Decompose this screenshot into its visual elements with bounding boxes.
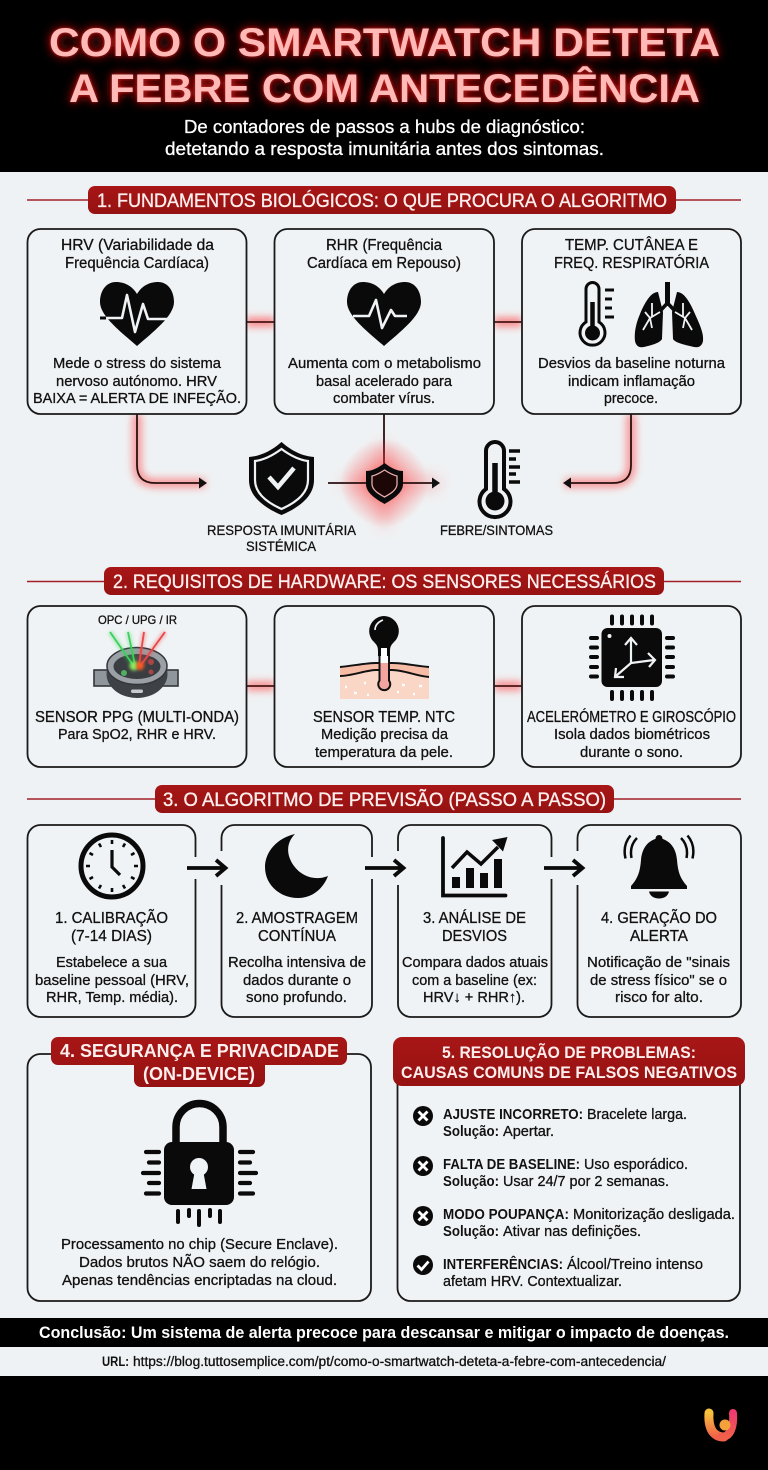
step 3 heading	[423, 910, 526, 945]
panel: step 2 continuous sampling	[222, 825, 372, 1017]
privacy text: Apenas tendências encriptadas na cloud.	[62, 1272, 337, 1289]
wavelength label: OPC / UPG / IR	[98, 613, 177, 627]
section heading 3	[27, 785, 741, 813]
section heading 2	[27, 567, 741, 595]
step 1 heading: (7-14 DIAS)	[71, 928, 152, 945]
temperature heading	[554, 237, 710, 272]
step 4 heading: 4. GERAÇÃO DO	[601, 910, 717, 927]
item: incorrect fit: AJUSTE INCORRETO:	[443, 1106, 583, 1123]
HRV heading	[61, 237, 214, 272]
privacy text	[61, 1236, 338, 1289]
item: power saving mode: MODO POUPANÇA:	[443, 1206, 569, 1223]
section 5 banner: CAUSAS COMUNS DE FALSOS NEGATIVOS	[401, 1063, 737, 1082]
icon: glowing small shield	[328, 439, 440, 527]
section 4 banner: (ON-DEVICE)	[143, 1064, 255, 1084]
step 1 text: RHR, Temp. média).	[46, 989, 178, 1006]
icon: rising chart	[443, 837, 508, 896]
panel: step 3 deviation analysis	[398, 825, 552, 1017]
label: systemic immune response	[207, 522, 357, 554]
icon: ringing bell	[625, 835, 693, 898]
item: missing baseline: Usar 24/7 por 2 semanas.	[503, 1173, 669, 1190]
RHR heading	[307, 237, 461, 272]
URL bar	[0, 1347, 768, 1376]
item: incorrect fit	[413, 1106, 687, 1140]
arrows between steps	[187, 851, 582, 885]
icon: moon	[265, 834, 328, 898]
item: interferences: Álcool/Treino intenso	[567, 1256, 703, 1273]
motion sensor description: Isola dados biométricos	[554, 726, 710, 743]
step 4 text: de stress físico" se o	[590, 972, 727, 989]
step 3 text: HRV↓ + RHR↑).	[423, 989, 525, 1006]
step 3 text	[402, 954, 548, 1006]
PPG description: SENSOR PPG (MULTI-ONDA)	[35, 709, 239, 726]
item: interferences: INTERFERÊNCIAS:	[443, 1255, 563, 1273]
item: incorrect fit: Solução:	[443, 1123, 499, 1140]
temperature description	[538, 355, 726, 407]
temperature description: Desvios da baseline noturna	[538, 355, 726, 372]
HRV description: BAIXA = ALERTA DE INFEÇÃO.	[33, 390, 241, 407]
icon: chip padlock	[143, 1104, 256, 1225]
URL bar: https://blog.tuttosemplice.com/pt/como-o-smartwatch-deteta-a-febre-com-antecedencia/	[133, 1354, 666, 1369]
section heading 2: 2. REQUISITOS DE HARDWARE: OS SENSORES NECESSÁRIOS	[113, 572, 656, 593]
section heading 3: 3. O ALGORITMO DE PREVISÃO (PASSO A PASSO)	[163, 789, 606, 811]
temperature heading: FREQ. RESPIRATÓRIA	[554, 255, 710, 272]
step 2 text: dados durante o	[243, 972, 351, 989]
step 4 heading: ALERTA	[630, 928, 689, 945]
temperature description: indicam inflamação	[568, 373, 695, 390]
panel: step 4 alert generation	[578, 825, 741, 1017]
step 2 heading	[236, 910, 358, 945]
RHR description: combater vírus.	[333, 390, 435, 407]
icon: logo	[709, 1413, 733, 1437]
title: A FEBRE COM ANTECEDÊNCIA	[69, 65, 700, 111]
item: missing baseline: Solução:	[443, 1173, 499, 1190]
step 4 text: Notificação de "sinais	[587, 954, 730, 971]
HRV description: Mede o stress do sistema	[53, 355, 222, 372]
step 3 heading: DESVIOS	[442, 928, 507, 945]
NTC description: Medição precisa da	[321, 726, 449, 743]
step 2 heading: CONTÍNUA	[258, 928, 337, 945]
section heading 1: 1. FUNDAMENTOS BIOLÓGICOS: O QUE PROCURA O ALGORITMO	[97, 190, 667, 212]
panel: RHR	[274, 229, 494, 414]
section 5 banner	[393, 1037, 745, 1086]
subtitle: De contadores de passos a hubs de diagnóstico:	[184, 117, 585, 137]
HRV description	[33, 355, 241, 407]
label: systemic immune response: RESPOSTA IMUNITÁRIA	[207, 522, 357, 538]
privacy text: Processamento no chip (Secure Enclave).	[61, 1236, 338, 1253]
conclusion bar: Conclusão: Um sistema de alerta precoce para descansar e mitigar o impacto de doenças.	[39, 1324, 729, 1342]
step 1 heading	[55, 910, 168, 945]
item: power saving mode: Ativar nas definições.	[503, 1223, 641, 1240]
title: COMO O SMARTWATCH DETETA	[49, 21, 720, 65]
NTC description: SENSOR TEMP. NTC	[313, 709, 455, 726]
header band	[0, 0, 768, 172]
RHR heading: Cardíaca em Repouso)	[307, 255, 461, 272]
item: incorrect fit: Apertar.	[503, 1123, 554, 1140]
PPG description: Para SpO2, RHR e HRV.	[58, 726, 216, 743]
step 4 text	[587, 954, 730, 1006]
icon: thermometer	[580, 282, 614, 345]
icon: PPG sensor with light beams	[94, 613, 178, 698]
item: interferences: afetam HRV. Contextualizar.	[443, 1273, 622, 1290]
motion sensor description	[527, 709, 736, 761]
step 1 text	[35, 954, 189, 1006]
section 5 banner: 5. RESOLUÇÃO DE PROBLEMAS:	[442, 1042, 696, 1062]
item: interferences	[413, 1255, 703, 1290]
PPG description	[35, 709, 239, 743]
step 4 text: risco for alto.	[615, 989, 703, 1006]
privacy text: Dados brutos NÃO saem do relógio.	[79, 1254, 320, 1271]
step 2 text	[228, 954, 366, 1006]
motion sensor description: durante o sono.	[580, 744, 683, 761]
item: incorrect fit: Bracelete larga.	[587, 1106, 687, 1123]
bottom black band	[0, 1376, 768, 1470]
temperature heading: TEMP. CUTÂNEA E	[565, 237, 698, 254]
step 2 text: sono profundo.	[246, 989, 347, 1006]
NTC description	[313, 709, 455, 761]
item: missing baseline: Uso esporádico.	[584, 1156, 688, 1173]
icon: fever thermometer	[479, 442, 520, 517]
step 1 heading: 1. CALIBRAÇÃO	[55, 910, 168, 927]
NTC description: temperatura da pele.	[315, 744, 453, 761]
icon: motion chip	[591, 616, 673, 699]
section heading 1	[27, 186, 741, 214]
panel: PPG sensor	[28, 606, 246, 767]
label: fever and symptoms: FEBRE/SINTOMAS	[440, 522, 553, 538]
panel: troubleshooting	[393, 1037, 745, 1301]
icon: temperature probe in skin	[340, 616, 429, 699]
step 3 text: com a baseline (ex:	[412, 972, 537, 989]
step 3 text: Compara dados atuais	[402, 954, 548, 971]
RHR description: basal acelerado para	[316, 373, 453, 390]
panel: HRV	[28, 229, 246, 414]
URL bar: URL:	[102, 1354, 129, 1369]
page background	[0, 172, 768, 1318]
icon: lungs	[635, 282, 703, 347]
item: power saving mode: Monitorização desligada.	[573, 1206, 735, 1223]
icon: heart with ECG	[100, 282, 174, 346]
connectors between sensor cards	[246, 682, 522, 690]
RHR description: Aumenta com o metabolismo	[288, 355, 481, 372]
RHR heading: RHR (Frequência	[326, 237, 442, 254]
step 1 text: Estabelece a sua	[56, 954, 168, 971]
panel: NTC temperature sensor	[274, 606, 494, 767]
icon: clock	[81, 835, 143, 897]
connectors between biological cards	[246, 318, 522, 326]
icon: heart with pulse	[347, 282, 421, 346]
temperature description: precoce.	[604, 390, 658, 407]
HRV heading: HRV (Variabilidade da	[61, 237, 214, 254]
item: missing baseline: FALTA DE BASELINE:	[443, 1156, 580, 1173]
step 4 heading	[601, 910, 717, 945]
section 4 banner	[51, 1037, 347, 1087]
item: missing baseline	[413, 1156, 688, 1190]
HRV description: nervoso autónomo. HRV	[56, 373, 217, 390]
HRV heading: Frequência Cardíaca)	[65, 255, 209, 272]
RHR description	[288, 355, 481, 407]
item: power saving mode	[413, 1206, 735, 1240]
title	[49, 21, 720, 111]
step 2 text: Recolha intensiva de	[228, 954, 366, 971]
item: power saving mode: Solução:	[443, 1223, 499, 1240]
step 3 heading: 3. ANÁLISE DE	[423, 910, 526, 927]
panel: security and privacy	[28, 1037, 371, 1301]
label: systemic immune response: SISTÉMICA	[246, 538, 317, 554]
conclusion bar	[0, 1318, 768, 1347]
icon: large shield with check	[249, 442, 314, 515]
subtitle: detetando a resposta imunitária antes dos sintomas.	[165, 139, 604, 159]
panel: step 1 calibration	[28, 825, 196, 1017]
flow arrows into timeline	[137, 414, 631, 488]
panel: skin temperature and respiration	[522, 229, 741, 414]
step 1 text: baseline pessoal (HRV,	[35, 972, 189, 989]
subtitle	[165, 117, 604, 159]
panel: accelerometer and gyroscope	[522, 606, 741, 767]
section 4 banner: 4. SEGURANÇA E PRIVACIDADE	[60, 1041, 339, 1061]
step 2 heading: 2. AMOSTRAGEM	[236, 910, 358, 927]
